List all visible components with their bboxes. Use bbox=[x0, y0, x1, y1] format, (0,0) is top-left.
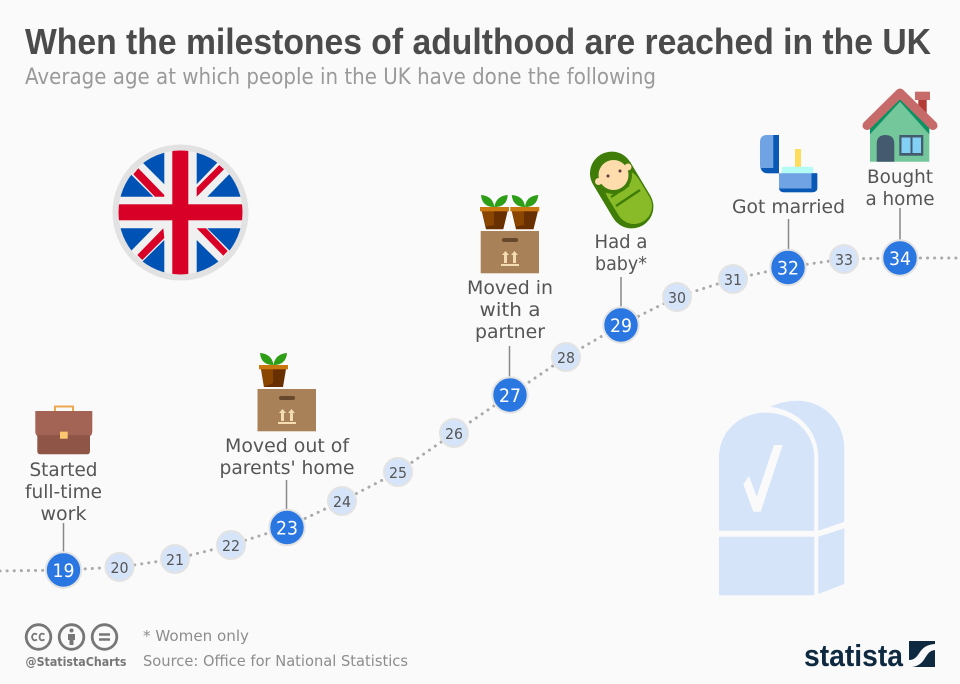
age 26 bbox=[440, 419, 468, 447]
age 22: 22 bbox=[222, 537, 240, 555]
age 23 bbox=[269, 510, 305, 545]
label: got married: Got married bbox=[732, 196, 845, 218]
icon: house bbox=[867, 92, 933, 162]
age 34: 34 bbox=[889, 248, 911, 270]
label: moved out of parents' home: parents' home bbox=[220, 457, 354, 479]
age 25 bbox=[384, 458, 412, 486]
label: bought a home: Bought bbox=[867, 166, 933, 188]
icon: creative commons licence bbox=[26, 625, 117, 649]
age 29: 29 bbox=[610, 315, 632, 337]
age 21 bbox=[161, 545, 189, 573]
age 19: 19 bbox=[52, 560, 74, 582]
icon: baby bbox=[594, 156, 640, 207]
icon: UK flag bbox=[112, 144, 248, 280]
source: Source: Office for National Statistics bbox=[143, 652, 408, 670]
age 32 bbox=[770, 250, 806, 285]
label: moved in with a partner: with a bbox=[480, 299, 540, 321]
age 23: 23 bbox=[276, 518, 298, 540]
label: had a baby: Had a bbox=[594, 231, 648, 253]
age 27 bbox=[492, 377, 528, 413]
icon: ring box bbox=[760, 135, 817, 192]
age nodes bbox=[46, 240, 918, 588]
statista logo: statista bbox=[804, 638, 904, 673]
age 21: 21 bbox=[166, 551, 184, 569]
age 25: 25 bbox=[389, 464, 407, 482]
age 20 bbox=[106, 553, 134, 581]
label: moved in with a partner: partner bbox=[475, 321, 545, 343]
label: had a baby: baby* bbox=[595, 253, 647, 275]
age 32: 32 bbox=[777, 258, 799, 280]
age 22 bbox=[217, 531, 245, 559]
icon: ballot box bbox=[719, 401, 844, 595]
icon: box with two plants bbox=[480, 195, 539, 273]
label: started full-time work: full-time bbox=[25, 481, 102, 503]
age 28 bbox=[552, 343, 580, 371]
age 31: 31 bbox=[724, 271, 742, 289]
credit handle: @StatistaCharts bbox=[26, 655, 126, 669]
label: moved out of parents' home: Moved out of bbox=[225, 435, 350, 457]
age 27: 27 bbox=[499, 385, 521, 407]
label: bought a home: a home bbox=[866, 188, 934, 210]
age 33: 33 bbox=[835, 251, 853, 269]
footnote: * Women only bbox=[143, 627, 249, 645]
age 33 bbox=[830, 245, 858, 273]
icon: briefcase bbox=[35, 406, 92, 454]
age 29 bbox=[603, 307, 639, 343]
dotted trend line bbox=[0, 258, 960, 571]
age 24: 24 bbox=[333, 493, 351, 511]
label: started full-time work: Started bbox=[30, 459, 98, 481]
age 34 bbox=[882, 240, 918, 276]
age 19 bbox=[46, 552, 81, 588]
connector lines bbox=[64, 208, 900, 555]
age 24 bbox=[328, 487, 356, 515]
subtitle: Average age at which people in the UK have done the following bbox=[25, 65, 656, 90]
age 31 bbox=[719, 265, 747, 293]
age 26: 26 bbox=[445, 425, 463, 443]
age 30 bbox=[663, 283, 691, 311]
age 28: 28 bbox=[557, 349, 575, 367]
age 30: 30 bbox=[668, 289, 686, 307]
label: started full-time work: work bbox=[40, 503, 86, 525]
label: moved in with a partner: Moved in bbox=[467, 277, 553, 299]
age 20: 20 bbox=[110, 559, 128, 577]
icon: box with one plant bbox=[258, 353, 316, 431]
